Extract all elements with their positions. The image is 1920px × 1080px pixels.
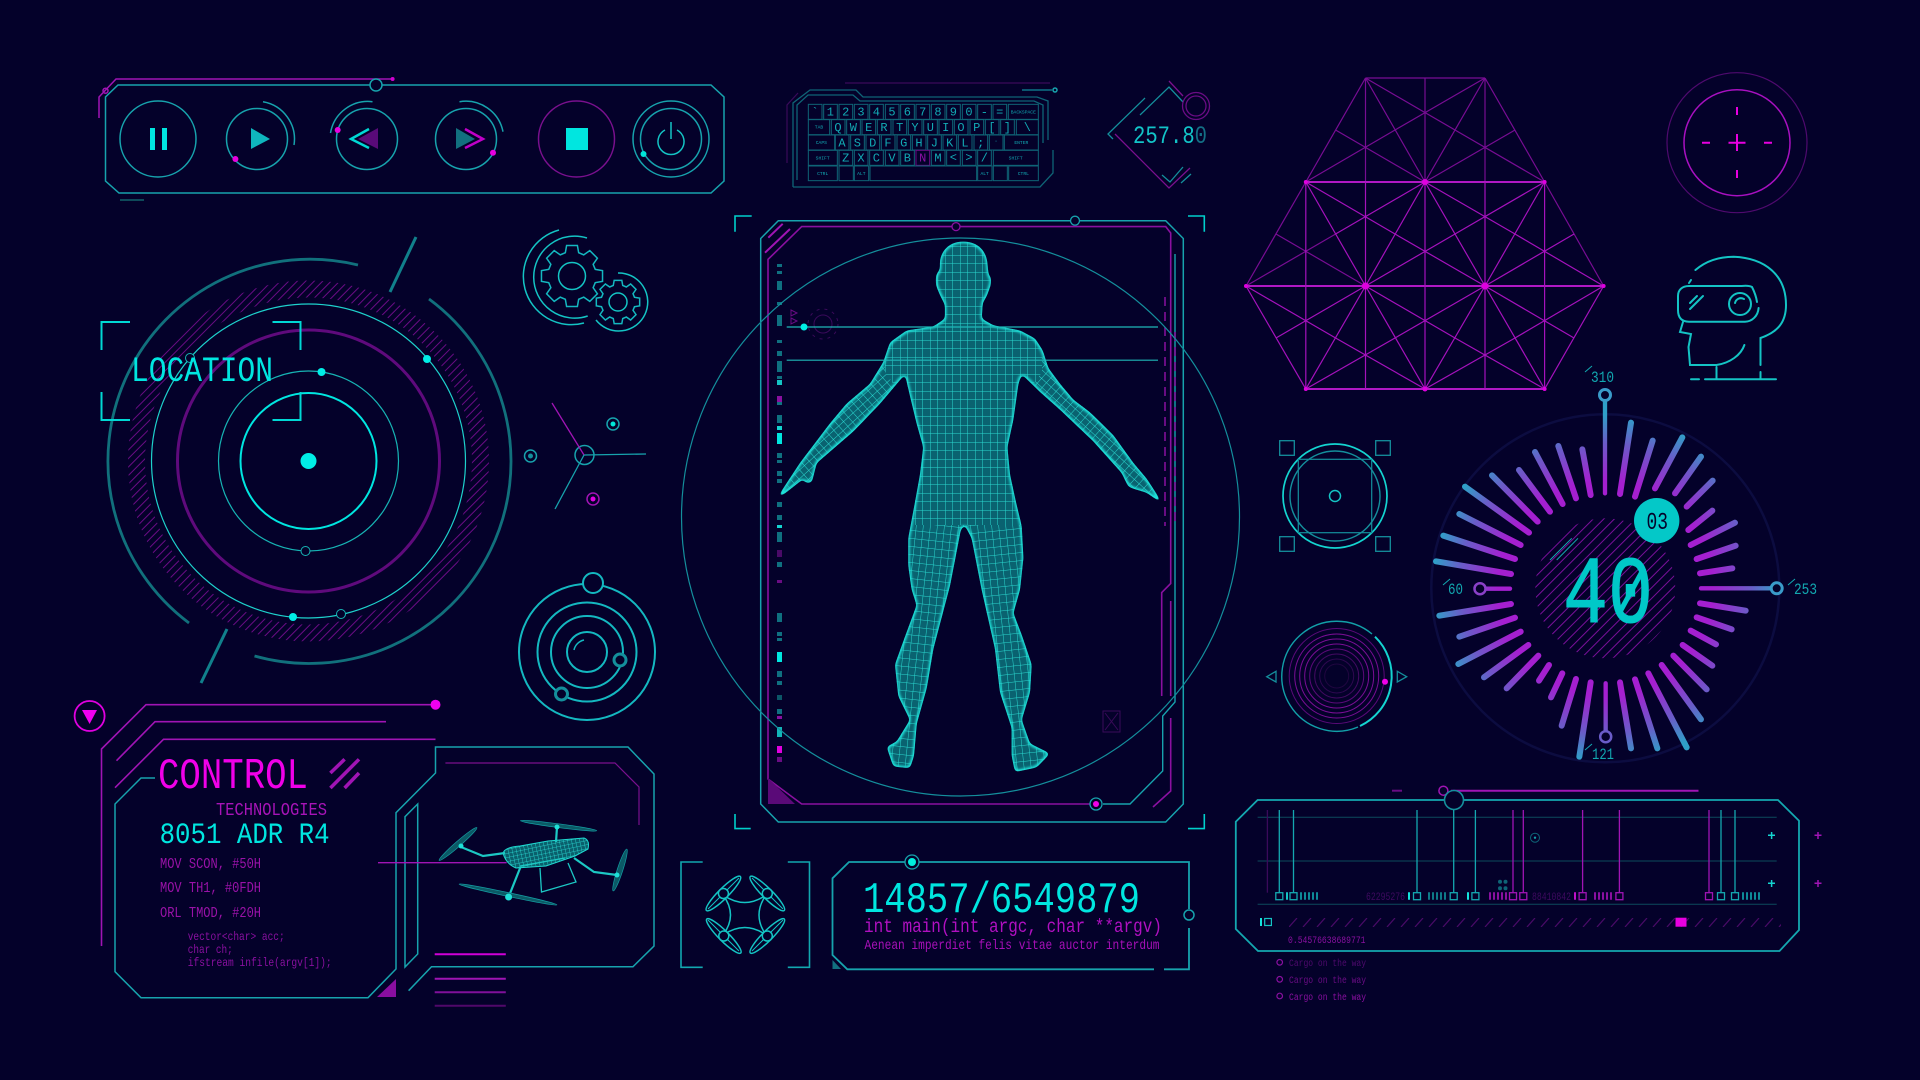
text: decimal value: 0.54576638689771: [1288, 936, 1366, 947]
keys row 2: ]: [1004, 121, 1011, 135]
keys row 4: /: [981, 152, 988, 166]
keys row 4: SHIFT: [816, 155, 830, 161]
list: cargo items: [1277, 958, 1366, 1004]
keys row 2: E: [865, 121, 872, 135]
text: assembly lines: ORL TMOD, #20H: [160, 905, 261, 922]
chart: radial gauge: [1431, 366, 1817, 764]
button: pause: [120, 101, 196, 177]
gauge labels: 121: [1592, 746, 1614, 764]
timeline codes: [1366, 892, 1571, 904]
gauge labels: [1448, 369, 1817, 764]
keys row 3: D: [869, 136, 876, 150]
keys row 2: Y: [911, 121, 919, 135]
keys row 4: N: [919, 152, 926, 166]
text: code lines: char ch;: [188, 943, 233, 957]
keys row 1: BACKSPACE: [1011, 109, 1036, 115]
keys row 2: U: [927, 121, 934, 135]
badge: 03: 03: [1646, 510, 1668, 537]
keys row 4: B: [904, 152, 911, 166]
panel: signal timeline: [1236, 786, 1822, 951]
keys row 1: 6: [904, 106, 911, 120]
drone illustration: [437, 819, 629, 907]
keys row 3: H: [915, 136, 923, 150]
icon: concentric spiral dial: [1267, 621, 1407, 731]
keys row 4: SHIFT: [1009, 155, 1023, 161]
keys row 1: 8: [934, 106, 942, 120]
timeline codes: 62295276: [1366, 892, 1405, 904]
keys row 2: W: [850, 121, 858, 135]
silhouette rim glow: [777, 242, 1163, 772]
text: model: 8051 ADR R4: [160, 819, 330, 853]
keys row 1: 3: [857, 106, 865, 120]
keys row 3: ;: [977, 136, 984, 150]
keys row 1: 7: [919, 106, 926, 120]
icon: target with corner squares: [1280, 441, 1390, 551]
text: code lines: [188, 930, 332, 970]
keys row 1: -: [981, 106, 988, 120]
keys row 3: A: [838, 136, 846, 150]
icon: orbit rings: [519, 573, 655, 720]
gauge labels: 60: [1448, 581, 1463, 599]
keys row 4: V: [888, 152, 896, 166]
keys row 2: \: [1024, 121, 1031, 135]
text: code lines: vector<char> acc;: [188, 930, 285, 944]
keys row 1: 5: [888, 106, 896, 120]
keys row 4: [808, 150, 1038, 166]
keys row 3: G: [900, 136, 907, 150]
faint icons: [791, 309, 1120, 732]
value: 40: 40: [1563, 542, 1653, 651]
keys row 5: [808, 166, 1038, 181]
icon: triangle button: [75, 701, 105, 731]
keys row 4: M: [934, 152, 942, 166]
keys row 1: 2: [842, 106, 849, 120]
caption: Aenean imperdiet felis vitae auctor interdum: [864, 938, 1160, 954]
keys row 4: Z: [842, 152, 849, 166]
keys row 2: O: [957, 121, 965, 135]
silhouette mesh: [780, 242, 1159, 772]
keys row 4: X: [857, 152, 865, 166]
text: code lines: ifstream infile(argv[1]);: [188, 956, 332, 970]
keys row 1: 4: [873, 106, 880, 120]
keys row 2: TAB: [815, 125, 823, 131]
icon: crosshair: [1667, 73, 1807, 213]
list: cargo items: Cargo on the way: [1289, 958, 1366, 970]
keys row 4: C: [873, 152, 880, 166]
keys row 1: =: [996, 106, 1003, 120]
keys row 1: `: [811, 105, 819, 119]
label: location: LOCATION: [131, 352, 273, 392]
keys row 3: S: [854, 136, 861, 150]
code signature: int main(int argc, char **argv): [864, 916, 1162, 938]
gauge labels: 253: [1794, 581, 1817, 599]
keys row 4: <: [950, 151, 957, 165]
spokes: [1436, 395, 1777, 757]
button: power: [633, 101, 709, 177]
keys row 1: 9: [950, 106, 957, 120]
icon: triple spinner: [524, 403, 646, 509]
button: rewind: [330, 101, 398, 170]
button: play: [226, 102, 294, 170]
keys row 2: [808, 120, 1038, 135]
keys row 2: T: [896, 121, 903, 135]
keys row 2: R: [880, 121, 888, 135]
badge: 03: [1634, 498, 1679, 543]
chart: triangulated hexagon: [1244, 78, 1606, 392]
keys row 3: L: [961, 136, 969, 150]
keys row 1: 1: [827, 106, 834, 120]
keys row 1: 0: [965, 106, 973, 120]
list: cargo items: Cargo on the way: [1289, 975, 1366, 987]
value: 14857/6549879: [863, 876, 1140, 926]
keys row 5: ALT: [857, 171, 866, 177]
gauge labels: 310: [1591, 369, 1614, 387]
icon: drone top view: [681, 862, 810, 967]
segment bar: [777, 264, 782, 762]
panel: media controls: [99, 77, 724, 201]
icon: vr head: [1678, 257, 1786, 379]
value: 257.80: [1133, 122, 1207, 151]
keys row 3: F: [884, 136, 892, 150]
keyboard: [787, 83, 1057, 187]
keys row 2: Q: [834, 121, 842, 135]
text: assembly lines: MOV SCON, #50H: [160, 856, 261, 873]
timeline codes: 88410842: [1532, 892, 1571, 904]
magenta markers: [1267, 810, 1712, 900]
keys row 2: [: [988, 121, 996, 135]
text: assembly lines: MOV TH1, #0FDH: [160, 880, 261, 897]
keys row 2: I: [942, 121, 949, 135]
outer ring arcs: [108, 259, 511, 663]
keys row 3: J: [931, 136, 938, 150]
keys row 3: K: [946, 136, 954, 150]
panel: location radar: [102, 237, 511, 683]
panel: control: [102, 700, 654, 1006]
text: technologies: TECHNOLOGIES: [216, 801, 327, 821]
text: assembly lines: [160, 856, 261, 922]
icon: gears: [523, 230, 648, 331]
button: stop: [538, 101, 614, 177]
keys row 5: ALT: [980, 171, 989, 177]
keys row 3: ': [995, 140, 997, 146]
keys row 3: CAPS: [816, 140, 827, 146]
teal markers: [1276, 810, 1738, 900]
keys row 3: ENTER: [1014, 140, 1029, 146]
vitruvian circle: [682, 238, 1240, 796]
keys row 3: [808, 135, 1038, 150]
keys row 2: P: [973, 121, 980, 135]
list: cargo items: Cargo on the way: [1289, 992, 1366, 1004]
panel: numeric readout: [832, 855, 1194, 969]
keys row 5: CTRL: [817, 171, 828, 177]
diamond readout: [1108, 81, 1210, 188]
heading: control: CONTROL: [158, 752, 308, 802]
panel: human body scan: [682, 216, 1240, 829]
keys row 1: [808, 104, 1038, 120]
keys row 4: >: [965, 151, 973, 165]
button: forward: [436, 101, 503, 170]
keys row 5: CTRL: [1018, 171, 1029, 177]
